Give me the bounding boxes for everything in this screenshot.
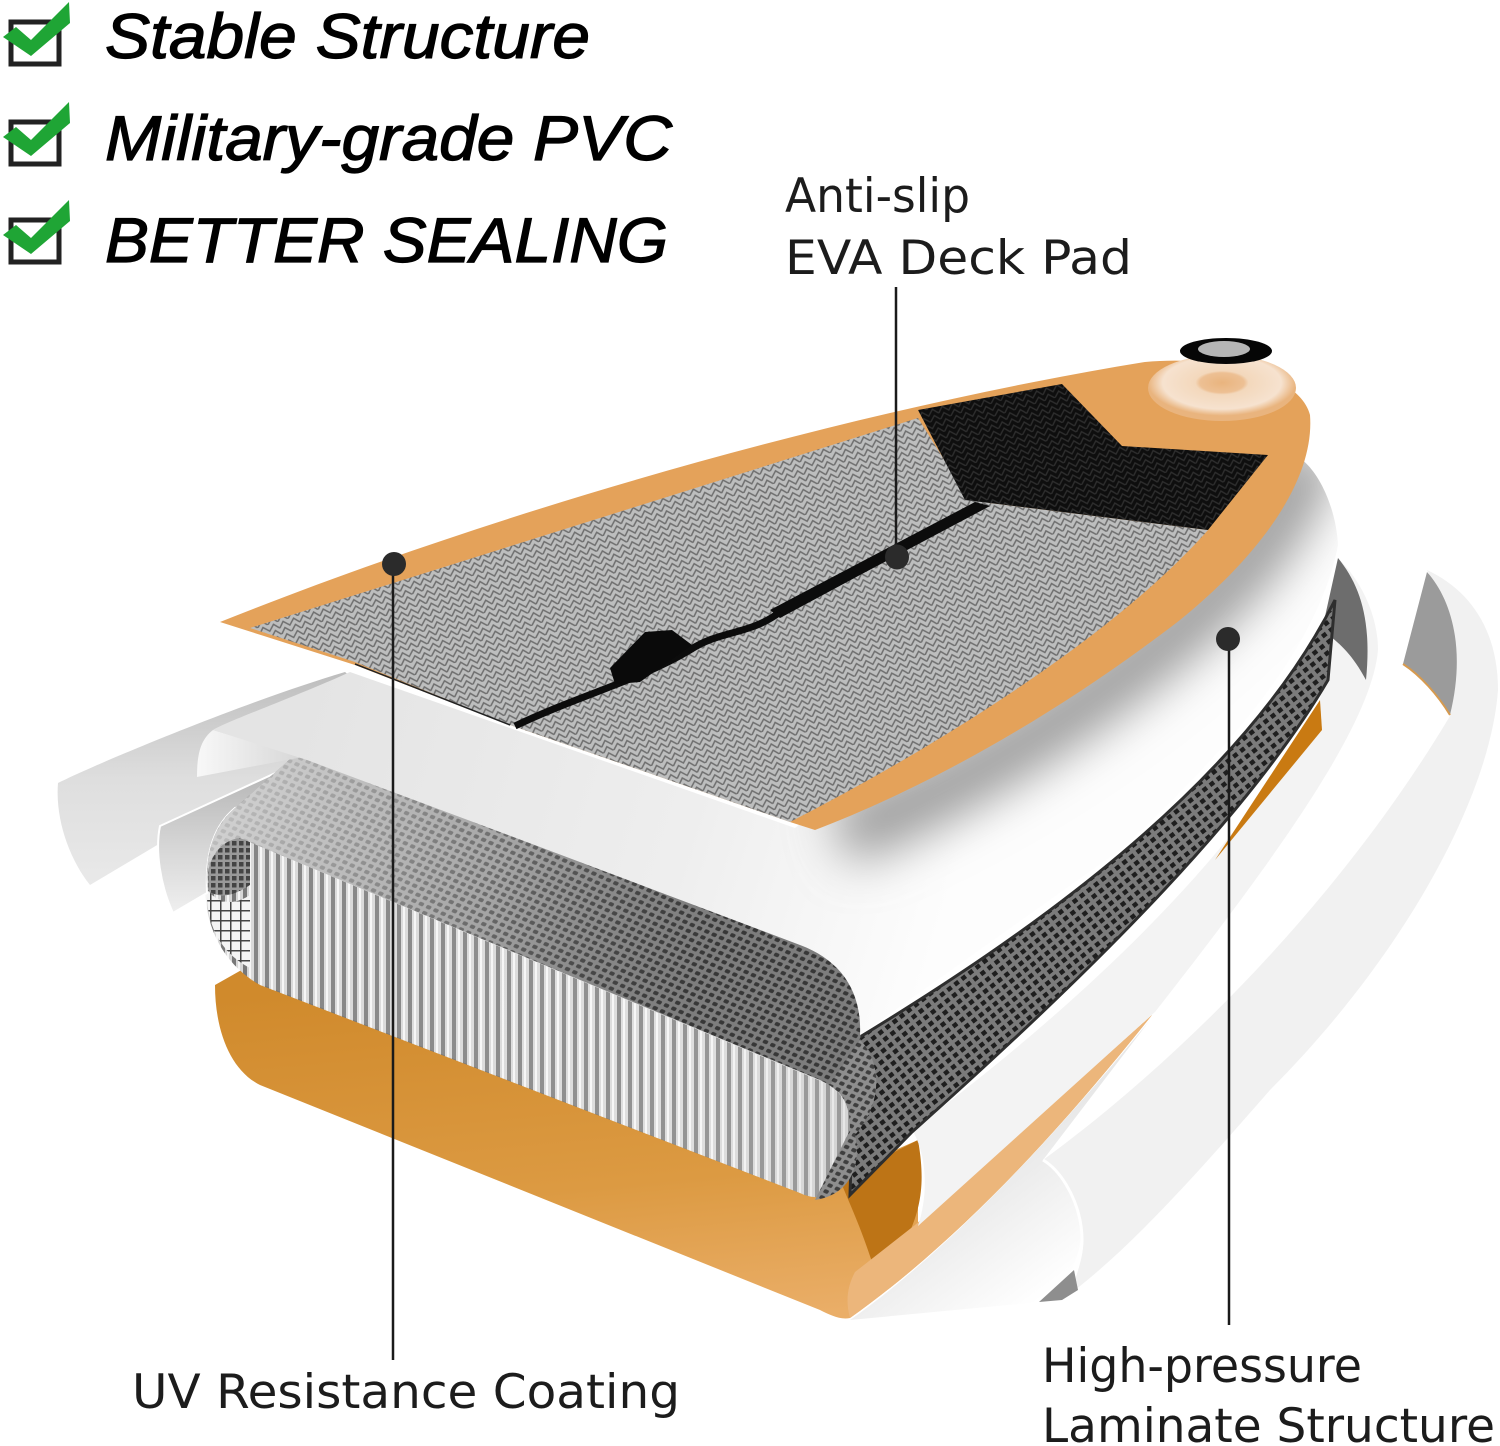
callout: high-pressure laminate [1042,627,1495,1446]
callout: anti-slip deck pad: EVA Deck Pad [785,231,1132,286]
deck: black tail pad [918,384,1268,530]
checkbox: stable structure [3,2,70,64]
feature text: military-grade PVC: Military-grade PVC [105,104,673,174]
checkbox: better sealing [3,200,70,262]
checklist: board features [3,2,673,276]
deck: bungee cord and buckle [515,502,990,726]
icon: valve cap [1180,338,1272,364]
callout: UV coating [132,552,680,1420]
layer: white top skin [197,450,1338,1035]
layer: left outer strip [58,672,355,885]
layer: mesh side wall [850,600,1335,1195]
layer: orange base [215,968,1152,1318]
callout: UV coating: UV Resistance Coating [132,1365,680,1420]
checkbox: military-grade PVC [3,102,70,164]
callout: anti-slip deck pad [785,169,1132,570]
callout: high-pressure laminate: High-pressure [1042,1339,1362,1394]
callout: anti-slip deck pad: Anti-slip [785,169,970,224]
layer: outer white shell strip, right [850,570,1498,1320]
feature text: stable structure: Stable Structure [105,2,590,72]
deck: orange outline [220,361,1310,830]
deck: traction pad [250,418,1208,822]
layer: drop-stitch core [205,838,854,1197]
board cross-section illustration [58,338,1498,1320]
layer: mesh top [207,745,876,1200]
layer: white PVC strip with gray end [912,558,1378,1226]
feature text: better sealing: BETTER SEALING [105,206,668,276]
deck: valve [1148,355,1296,421]
layer: left white sheet [158,759,345,913]
